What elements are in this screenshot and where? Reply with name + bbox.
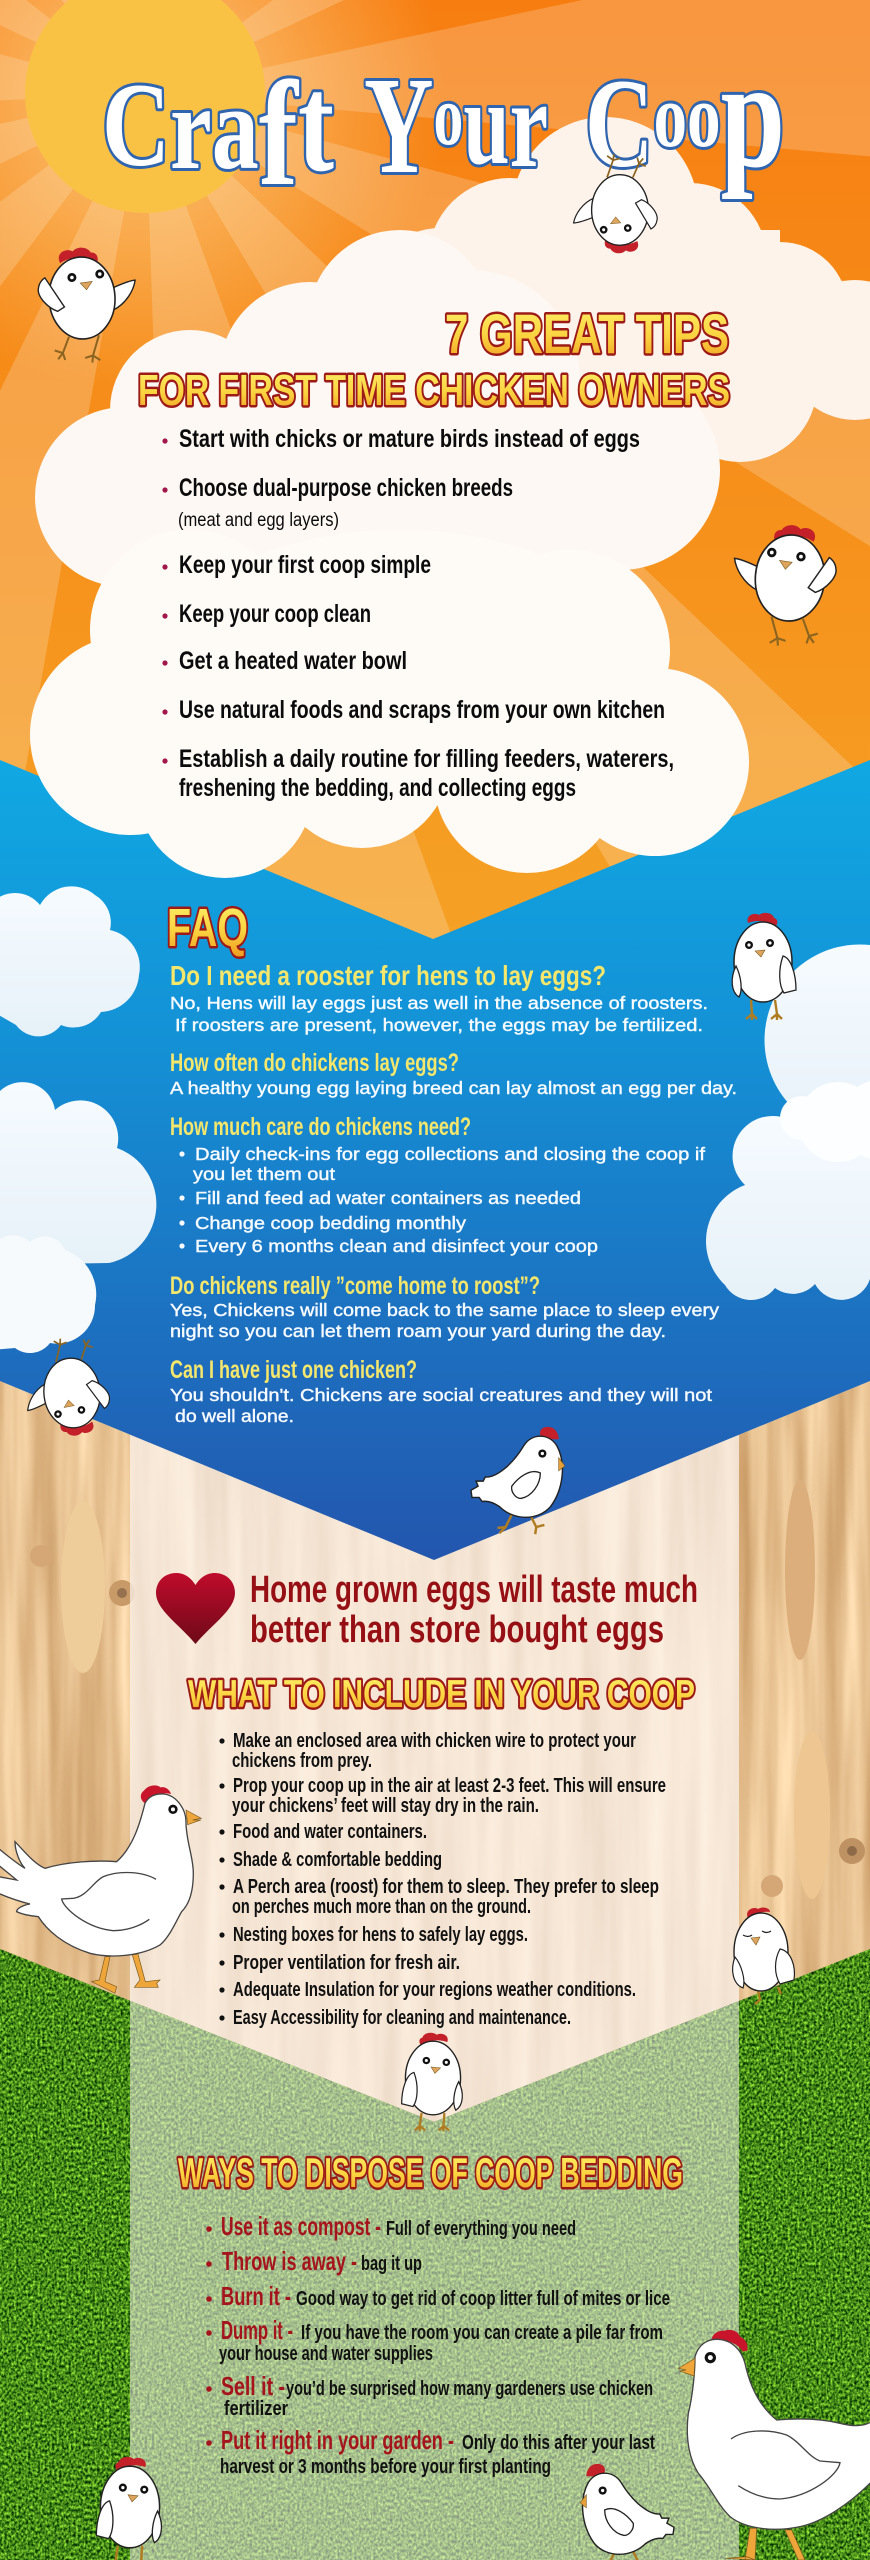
question 2 [170,1049,737,1098]
title [102,28,785,217]
include list: Proper ventilation for fresh air. [233,1952,460,1974]
question 2: A healthy young egg laying breed can lay almost an egg per day. [170,1078,737,1098]
tips list: Keep your coop clean [179,600,371,628]
tips list: Keep your first coop simple [179,551,431,579]
question 4: Yes, Chickens will come back to the same place to sleep every [170,1300,719,1320]
sun [25,0,265,213]
include list: your chickens’ feet will stay dry in the rain. [232,1795,539,1817]
question 3: How much care do chickens need? [170,1113,471,1141]
background: blue chevron band [0,760,870,1560]
heading: FAQ: FAQ [167,898,248,958]
tips list: Establish a daily routine for filling feeders, waterers, [179,745,674,773]
question 3: Daily check-ins for egg collections and closing the coop if [195,1144,705,1164]
question 3: Change coop bedding monthly [195,1213,466,1233]
question 5: do well alone. [175,1406,294,1426]
icon: heart [156,1573,235,1644]
title: Y [364,49,464,203]
question 5: You shouldn't. Chickens are social creatures and they will not [170,1385,712,1405]
chick: bottom side view [580,2464,674,2560]
question 1: If roosters are present, however, the eggs may be fertilized. [175,1015,703,1035]
tips list: (meat and egg layers) [178,510,339,531]
chick: waving left [36,245,139,365]
include list: Adequate Insulation for your regions weather conditions. [233,1979,636,2001]
cloud: lower cloud [30,530,749,878]
title: ra [170,61,259,194]
chick: bottom left [96,2457,161,2560]
question 1: No, Hens will lay eggs just as well in the absence of roosters. [170,993,708,1013]
include list [219,1730,666,2029]
chick: standing centre [402,2033,462,2131]
disposal list: Use it as compost - [221,2211,381,2241]
include list: Food and water containers. [233,1821,427,1843]
title: r [510,56,548,194]
question 5: Can I have just one chicken? [170,1356,417,1384]
include list: Nesting boxes for hens to safely lay eggs. [233,1924,528,1946]
chick: sleeping right [733,1908,794,2004]
disposal list: Throw is away - [222,2246,357,2276]
include list: chickens from prey. [232,1750,372,1772]
section: what to include [188,1673,695,2029]
question 1: Do I need a rooster for hens to lay eggs? [170,960,606,991]
heading: 7 great tips: 7 GREAT TIPS [445,302,729,365]
callout: home grown eggs: better than store bought eggs [250,1609,664,1651]
title: u [463,56,510,189]
tips list: Start with chicks or mature birds instead of eggs [179,425,640,453]
tips list: freshening the bedding, and collecting eggs [179,774,576,802]
clouds: blue sky clouds [0,886,870,1353]
disposal list: Dump it - [221,2315,293,2345]
disposal list: Good way to get rid of coop litter full of mites or lice [296,2288,670,2310]
illustration: big hen left [0,1785,201,1993]
section: ways to dispose of coop bedding [178,2149,683,2478]
title: o [434,67,463,163]
chick: waving right [729,521,839,649]
title: C [585,54,677,194]
section: 7 great tips [138,302,730,802]
disposal list: Full of everything you need [386,2218,576,2240]
question 4: night so you can let them roam your yard during the day. [170,1321,666,1341]
disposal list: Sell it - [221,2371,285,2401]
chick: upside down left [21,1334,113,1440]
illustration: big hen right [678,2330,870,2560]
question 3: Every 6 months clean and disinfect your coop [195,1236,598,1256]
question 3 [170,1113,705,1256]
include list: Shade & comfortable bedding [233,1849,442,1871]
question 2: How often do chickens lay eggs? [170,1049,459,1077]
disposal list [206,2211,670,2478]
question 3: you let them out [193,1164,335,1184]
question 4 [170,1272,719,1341]
disposal list: Burn it - [221,2281,291,2311]
disposal list: Only do this after your last [462,2432,655,2454]
background: sunburst sky [0,0,870,1093]
include list: A Perch area (roost) for them to sleep. They prefer to sleep [233,1876,659,1898]
title: f [259,51,300,217]
cloud: top back cloud [368,117,870,462]
disposal list: your house and water supplies [219,2343,433,2365]
tips list [162,425,674,802]
title: t [298,47,334,200]
tips list: Use natural foods and scraps from your own kitchen [179,696,665,724]
include list: Make an enclosed area with chicken wire to protect your [233,1730,636,1752]
background: wood planks [0,1370,870,2140]
question 1 [170,960,708,1035]
include list: on perches much more than on the ground. [232,1896,531,1918]
title: C [102,58,189,191]
title: p [721,28,785,200]
chick: upside down under title [574,154,657,253]
callout: home grown eggs [250,1569,698,1651]
disposal list: If you have the room you can create a pile far from [301,2322,663,2344]
section: FAQ [167,898,737,1426]
tips list: Choose dual-purpose chicken breeds [179,474,513,502]
disposal list: bag it up [361,2253,422,2275]
disposal list: harvest or 3 months before your first planting [220,2456,551,2478]
background: grass [0,1940,870,2560]
question 4: Do chickens really ”come home to roost”? [170,1272,540,1300]
disposal list: you’d be surprised how many gardeners use chicken [286,2378,653,2400]
cloud: middle cloud [35,230,720,590]
heading: what to include in your coop: WHAT TO INCLUDE IN YOUR COOP [188,1673,695,1716]
tips list: Get a heated water bowl [179,647,407,675]
callout: home grown eggs: Home grown eggs will taste much [250,1569,698,1611]
disposal list: fertilizer [224,2398,288,2420]
chick: side view on chevron [471,1427,565,1534]
title: oo [653,67,721,166]
include list: Prop your coop up in the air at least 2-3 feet. This will ensure [233,1775,666,1797]
question 3: Fill and feed ad water containers as needed [195,1188,581,1208]
disposal list: Put it right in your garden - [221,2425,454,2455]
chick: standing top right of FAQ [732,913,796,1020]
question 5 [170,1356,712,1426]
include list: Easy Accessibility for cleaning and maintenance. [233,2007,571,2029]
